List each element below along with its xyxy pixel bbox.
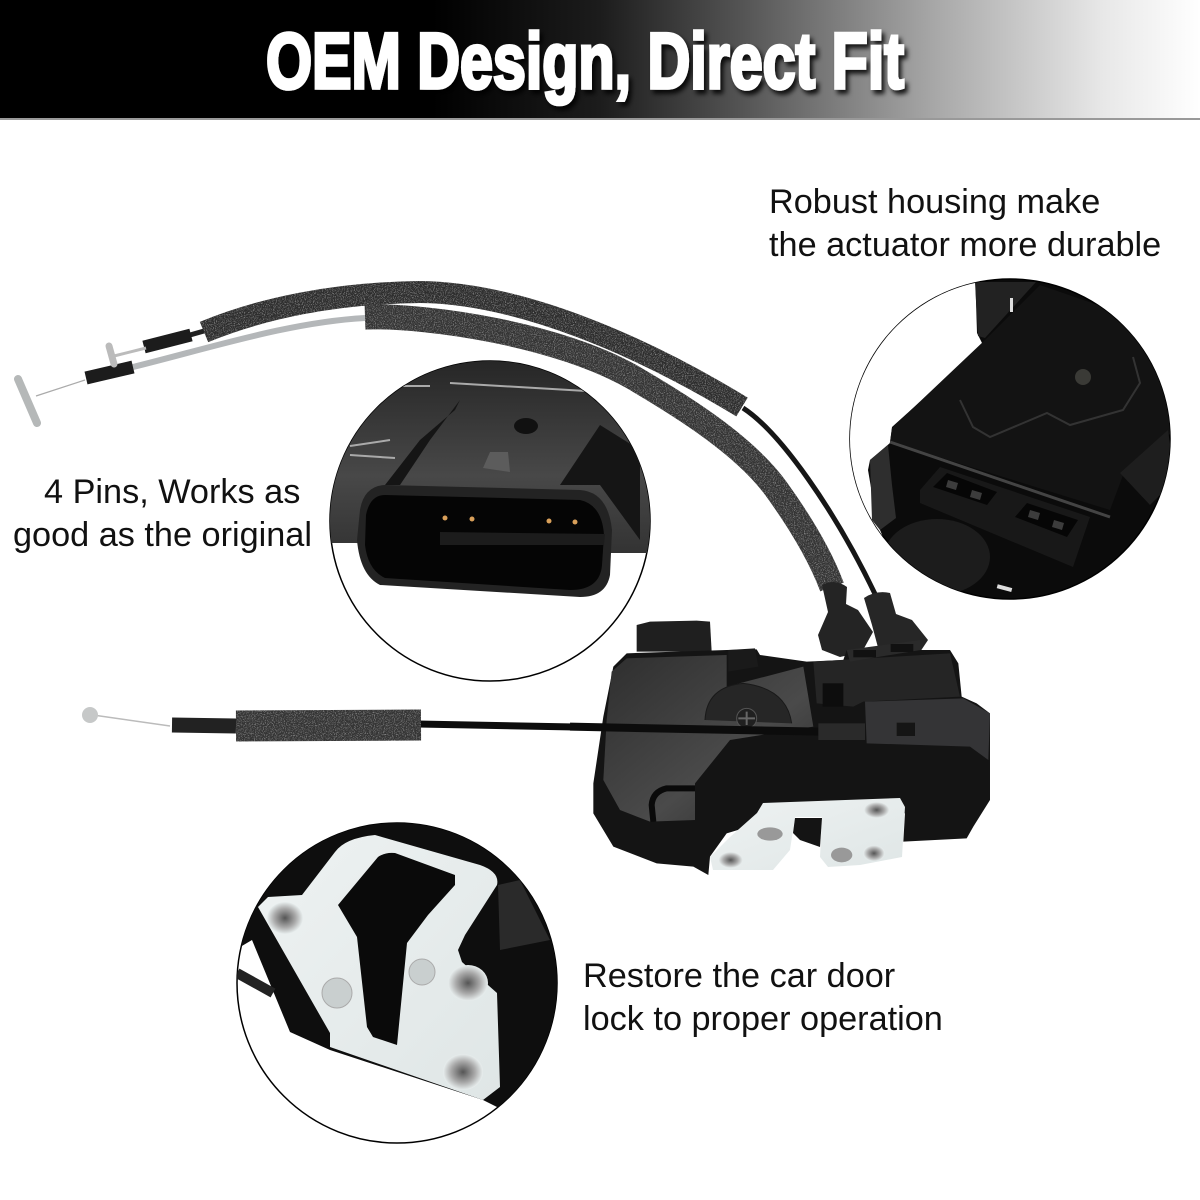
crimp lower: [86, 367, 133, 378]
cover window: [897, 723, 915, 736]
housing dark: [235, 823, 560, 1107]
cavity texture: [440, 532, 605, 545]
silver latch plate: [258, 835, 500, 1100]
connector shell: [357, 485, 612, 597]
crimp: [172, 725, 236, 726]
inner stub of second cable: [190, 331, 204, 335]
callout text: restore door lock: Restore the car door: [583, 957, 895, 995]
slot highlight: [1010, 298, 1013, 312]
rivet right: [409, 959, 435, 985]
callout text: 4 pins: 4 Pins, Works as: [44, 473, 300, 511]
plug pins: [946, 480, 1064, 530]
plate opening: [338, 853, 455, 1045]
housing glossy stripe: [498, 880, 550, 950]
detail circle: latch plate: [235, 823, 560, 1143]
rod clip: [818, 723, 865, 740]
wire: [93, 715, 170, 726]
title: OEM Design, Direct Fit: [266, 16, 904, 105]
rear slot: [975, 282, 1036, 338]
cable boots: [818, 582, 928, 657]
housing top: [890, 304, 1170, 442]
detail circle: robust housing: [840, 270, 1175, 610]
clip window: [823, 683, 843, 707]
detail circle: connector with pins: [320, 360, 660, 681]
rubber boot: [884, 519, 990, 595]
left panel: [603, 655, 813, 822]
U channel: [652, 788, 695, 822]
main housing: [593, 649, 990, 875]
top ridge highlights: [350, 382, 584, 459]
screw boss: [737, 708, 757, 728]
right lower piece: [1120, 430, 1170, 505]
callout text: robust housing: the actuator more durable: [769, 226, 1161, 264]
four gold pins: [442, 516, 578, 524]
dark mark: [514, 418, 538, 434]
plug slots: [853, 644, 913, 657]
upper right cover: [813, 653, 960, 707]
header banner: [0, 0, 1200, 120]
connector cavity: [365, 495, 604, 590]
cable in circle: [237, 973, 273, 993]
lower cable: [82, 707, 575, 727]
lock actuator: [570, 621, 990, 875]
top connector: [637, 621, 712, 652]
connector latch guides: [385, 400, 640, 540]
steel tube: [133, 318, 365, 367]
foam sleeve: [236, 725, 421, 726]
wire upper: [114, 348, 146, 356]
wire to T-end: [36, 380, 85, 396]
latch tab: [483, 452, 510, 472]
rivet left: [322, 978, 352, 1008]
callout text: robust housing: [769, 183, 1161, 264]
callout text: robust housing: Robust housing make: [769, 183, 1100, 221]
long black rod: [570, 727, 820, 732]
callout text: restore door lock: [583, 957, 943, 1038]
callout text: restore door lock: lock to proper operation: [583, 1000, 943, 1038]
rod: [418, 724, 575, 727]
lower foam sleeve: [365, 317, 832, 587]
callout text: 4 pins: [13, 473, 312, 554]
plug windows: [933, 473, 1078, 537]
thin black cable: [743, 408, 876, 596]
white sliver: [997, 584, 1012, 592]
upper foam sleeve: [204, 292, 742, 407]
body ridge: [890, 442, 1110, 517]
housing backdrop: [320, 360, 660, 553]
embossed dome: [705, 683, 792, 723]
tab on housing: [728, 648, 758, 672]
plate rivets and bosses: [719, 802, 889, 868]
right cover: [865, 698, 990, 760]
screw: [1075, 369, 1091, 385]
threaded bosses: [267, 902, 488, 1090]
side rim: [870, 445, 896, 530]
upper left cable assembly: [18, 292, 876, 596]
callout text: 4 pins: good as the original: [13, 516, 312, 554]
plate slot: [793, 818, 822, 847]
latch plate: [710, 798, 905, 870]
crimp upper: [144, 335, 191, 347]
white background area: [850, 282, 982, 536]
T-end lower: [18, 379, 37, 423]
ball end: [82, 707, 98, 723]
connector windows: [847, 640, 921, 662]
plug frame: [920, 467, 1090, 567]
T-end upper: [109, 346, 114, 364]
embossed cover: [960, 357, 1140, 437]
